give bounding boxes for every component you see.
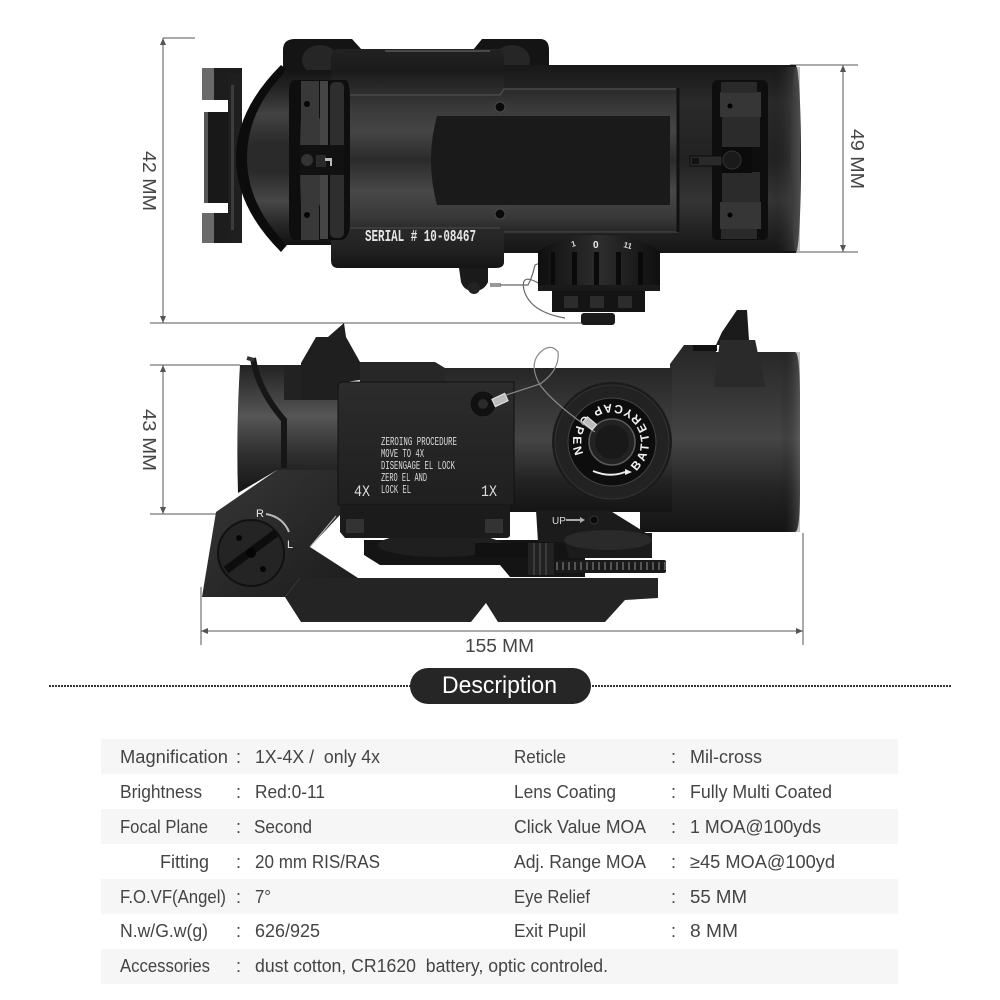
- zeroing text: 4X: [354, 483, 370, 501]
- left column: Magnification: [120, 747, 228, 767]
- right column: Click Value MOA: [514, 817, 646, 837]
- brightness knob: 11: [622, 240, 634, 251]
- left column: 20 mm RIS/RAS: [255, 852, 380, 872]
- rear sight: [301, 323, 360, 400]
- right front turret: [690, 80, 768, 240]
- zeroing text: ZERO EL AND: [381, 471, 427, 485]
- left column: Brightness: [120, 782, 202, 802]
- wire loop: [492, 347, 597, 432]
- brightness knob: [538, 235, 660, 325]
- right column: :: [671, 817, 676, 837]
- zeroing text: DISENGAGE EL LOCK: [381, 459, 455, 473]
- wire: [500, 263, 565, 318]
- left column: :: [236, 887, 241, 907]
- dark window: [431, 116, 670, 205]
- plate screw: [470, 391, 496, 417]
- right column: Mil-cross: [690, 747, 762, 767]
- base rail: [285, 578, 658, 622]
- mechanism under plate: [364, 540, 585, 577]
- left column: :: [236, 852, 241, 872]
- gear: [556, 560, 666, 573]
- left column: [120, 747, 608, 976]
- eyepiece: [237, 365, 340, 493]
- section divider: Description: [49, 668, 951, 704]
- zeroing text: ZEROING PROCEDURE: [381, 435, 457, 449]
- bell and tube: [640, 345, 800, 532]
- left column: dust cotton, CR1620 battery, optic controled.: [255, 956, 608, 976]
- right column: Exit Pupil: [514, 921, 586, 941]
- row stripes: [101, 739, 898, 984]
- battery cap: BATTERYCAP OPEN: [573, 404, 649, 471]
- right column: :: [671, 887, 676, 907]
- front sight: [693, 310, 765, 387]
- eye cup: [236, 65, 340, 252]
- right column: 55 MM: [690, 887, 747, 907]
- brightness knob: 0: [593, 240, 599, 251]
- left column: Red:0-11: [255, 782, 325, 802]
- zeroing text: 1X: [481, 483, 497, 501]
- right column: ≥45 MOA@100yd: [690, 852, 835, 872]
- raised panel: [350, 88, 678, 232]
- serial number: SERIAL # 10-08467: [365, 228, 476, 247]
- left column: Second: [254, 817, 312, 837]
- dimension: 155 MM: 155 MM: [465, 636, 534, 656]
- elevation lever housing: [536, 510, 652, 558]
- lever and knurl: [475, 543, 554, 575]
- right column: :: [671, 782, 676, 802]
- specification table: [101, 739, 898, 984]
- zeroing text: MOVE TO 4X: [381, 447, 424, 461]
- left column: Fitting: [160, 852, 209, 872]
- rear and front top bumps: [283, 39, 549, 75]
- right column: Eye Relief: [514, 887, 591, 907]
- dimension: 155 MM: [201, 533, 803, 656]
- main tube: [500, 65, 796, 253]
- screw holes: [495, 102, 505, 219]
- left column: :: [236, 921, 241, 941]
- pill heading: Description: [442, 672, 557, 699]
- dimension: 42 MM: 42 MM: [139, 151, 159, 211]
- left column: Focal Plane: [120, 817, 208, 837]
- side view of scope: [202, 310, 800, 622]
- right column: Lens Coating: [514, 782, 616, 802]
- right column: :: [671, 852, 676, 872]
- rail clamps: [202, 68, 242, 243]
- left column: 626/925: [255, 921, 320, 941]
- side plate: [338, 382, 514, 505]
- left column: :: [236, 817, 241, 837]
- battery cap: [552, 382, 672, 500]
- elevation lever housing: UP: [552, 516, 566, 527]
- dimension: 43 MM: 43 MM: [139, 409, 159, 471]
- dimension: 43 MM: [139, 365, 240, 514]
- right column: Reticle: [514, 747, 566, 767]
- right column: Adj. Range MOA: [514, 852, 646, 872]
- left rear turret: [289, 80, 350, 240]
- left column: F.O.VF(Angel): [120, 887, 226, 907]
- pill heading: [410, 668, 591, 704]
- mounting wedge: [202, 470, 358, 597]
- zeroing text: [354, 435, 497, 501]
- left column: :: [236, 956, 241, 976]
- left column: Accessories: [120, 956, 210, 976]
- right column: 1 MOA@100yds: [690, 817, 821, 837]
- windage dial: R: [256, 508, 264, 520]
- top view of scope: [202, 39, 801, 325]
- left column: :: [236, 747, 241, 767]
- right column: [514, 747, 835, 941]
- central housing: [331, 49, 504, 268]
- windage dial: [218, 508, 293, 586]
- right column: :: [671, 921, 676, 941]
- left column: N.w/G.w(g): [120, 921, 208, 941]
- dimension: 42 MM: [139, 38, 590, 323]
- brightness knob: 1: [570, 239, 577, 249]
- rubber strap: [253, 358, 284, 468]
- windage dial: L: [287, 539, 293, 551]
- dimension: 49 MM: [790, 65, 867, 252]
- right column: 8 MM: [690, 921, 738, 941]
- side button: [459, 268, 501, 294]
- zeroing text: LOCK EL: [381, 483, 411, 497]
- dimension: 49 MM: 49 MM: [847, 129, 867, 189]
- left column: 7°: [255, 887, 271, 907]
- right column: :: [671, 747, 676, 767]
- left column: :: [236, 782, 241, 802]
- right column: Fully Multi Coated: [690, 782, 832, 802]
- left column: 1X-4X / only 4x: [255, 747, 380, 767]
